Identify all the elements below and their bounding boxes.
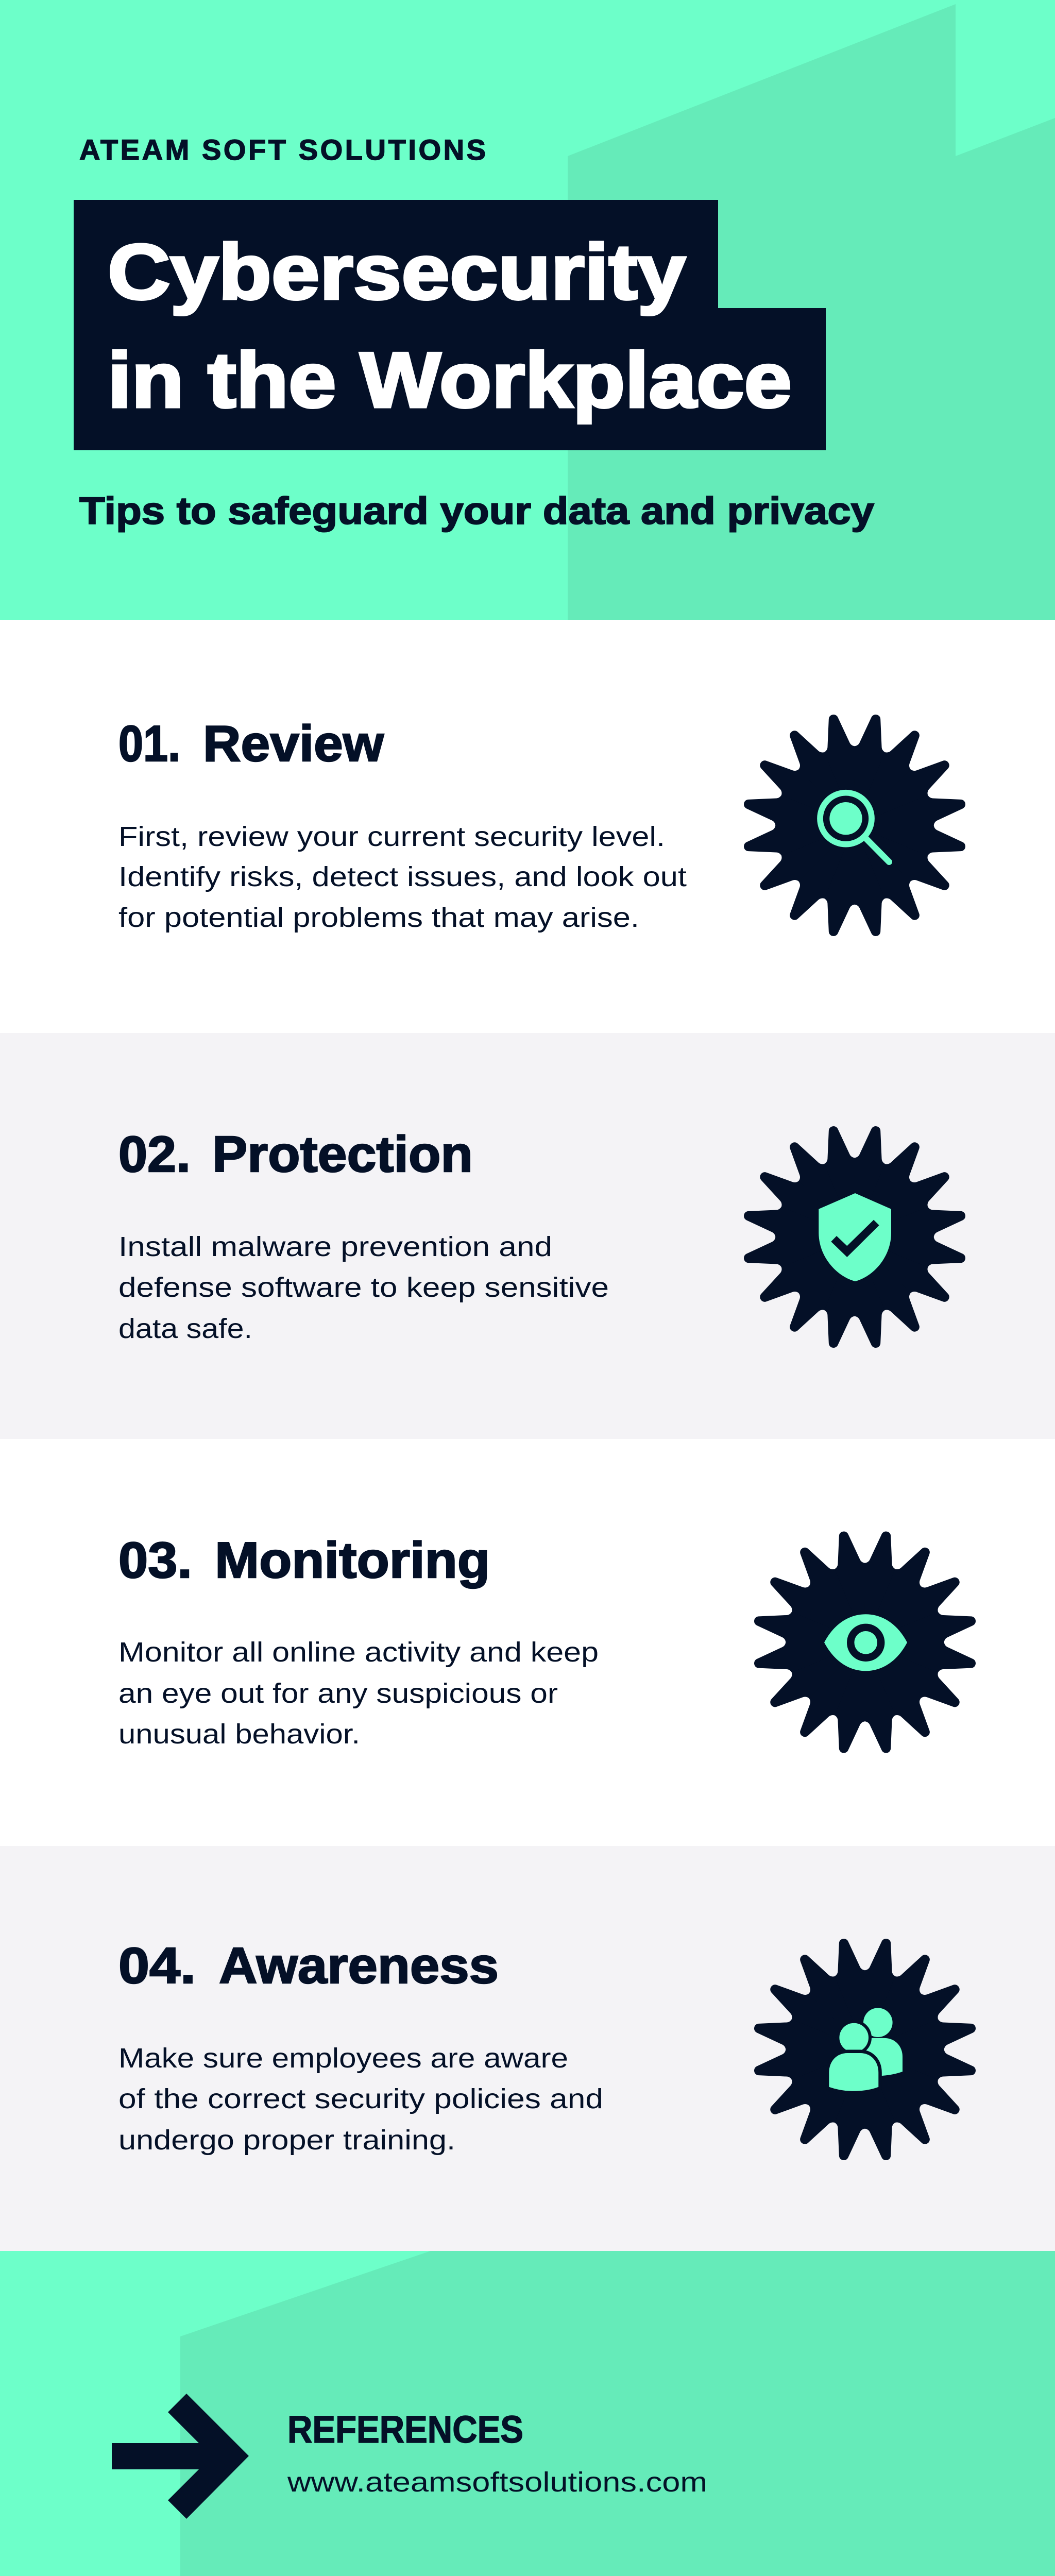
heading: 02 Protection: 02. bbox=[118, 1126, 191, 1182]
text: Review description: for potential problems that may arise. bbox=[118, 902, 639, 933]
icon: people badge bbox=[751, 1936, 979, 2163]
heading: 04 Awareness: Awareness bbox=[219, 1937, 499, 1994]
text: Protection description: data safe. bbox=[118, 1313, 252, 1344]
heading: 01 Review: 01. bbox=[118, 715, 180, 772]
panel: header bbox=[0, 0, 1055, 620]
title block: Cybersecurity bbox=[108, 228, 686, 316]
panel: 03 Monitoring bbox=[0, 1439, 1055, 1846]
panel: footer references bbox=[0, 2251, 1055, 2576]
text: Review description: Identify risks, detect issues, and look out bbox=[118, 861, 687, 892]
subtitle: Tips to safeguard your data and privacy bbox=[79, 489, 874, 532]
title block: in the Workplace bbox=[108, 336, 792, 424]
title block bbox=[74, 200, 826, 450]
text: Monitoring description bbox=[118, 1637, 599, 1750]
arrow bbox=[112, 2394, 249, 2519]
text: Review description bbox=[118, 821, 687, 933]
references heading: REFERENCES bbox=[287, 2408, 523, 2451]
text: Review description: First, review your current security level. bbox=[118, 821, 665, 852]
heading: 01 Review bbox=[118, 715, 384, 772]
heading: 04 Awareness bbox=[118, 1937, 499, 1994]
text: Awareness description: undergo proper training. bbox=[118, 2125, 455, 2156]
icon: eye badge bbox=[751, 1529, 979, 1756]
icon: shield badge bbox=[741, 1123, 968, 1351]
text: Protection description: Install malware prevention and bbox=[118, 1231, 552, 1262]
text: Awareness description: Make sure employees are aware bbox=[118, 2043, 568, 2074]
text: Monitoring description: Monitor all online activity and keep bbox=[118, 1637, 599, 1668]
heading: 04 Awareness: 04. bbox=[118, 1937, 196, 1994]
heading: 02 Protection: Protection bbox=[212, 1126, 473, 1182]
panel: 02 Protection bbox=[0, 1033, 1055, 1439]
heading: 03 Monitoring: Monitoring bbox=[215, 1532, 490, 1588]
company name: ATEAM SOFT SOLUTIONS bbox=[79, 133, 486, 166]
panel: 01 Review bbox=[0, 620, 1055, 1033]
references url: www.ateamsoftsolutions.com bbox=[287, 2467, 707, 2498]
text: Monitoring description: unusual behavior. bbox=[118, 1719, 360, 1750]
text: Awareness description: of the correct security policies and bbox=[118, 2083, 603, 2114]
icon: magnifier badge bbox=[741, 711, 968, 939]
text: Protection description: defense software to keep sensitive bbox=[118, 1272, 609, 1303]
heading: 01 Review: Review bbox=[203, 715, 384, 772]
text: Monitoring description: an eye out for any suspicious or bbox=[118, 1678, 558, 1709]
panel: 04 Awareness bbox=[0, 1846, 1055, 2251]
heading: 03 Monitoring: 03. bbox=[118, 1532, 192, 1588]
text: Awareness description bbox=[118, 2043, 603, 2156]
text: Protection description bbox=[118, 1231, 609, 1344]
